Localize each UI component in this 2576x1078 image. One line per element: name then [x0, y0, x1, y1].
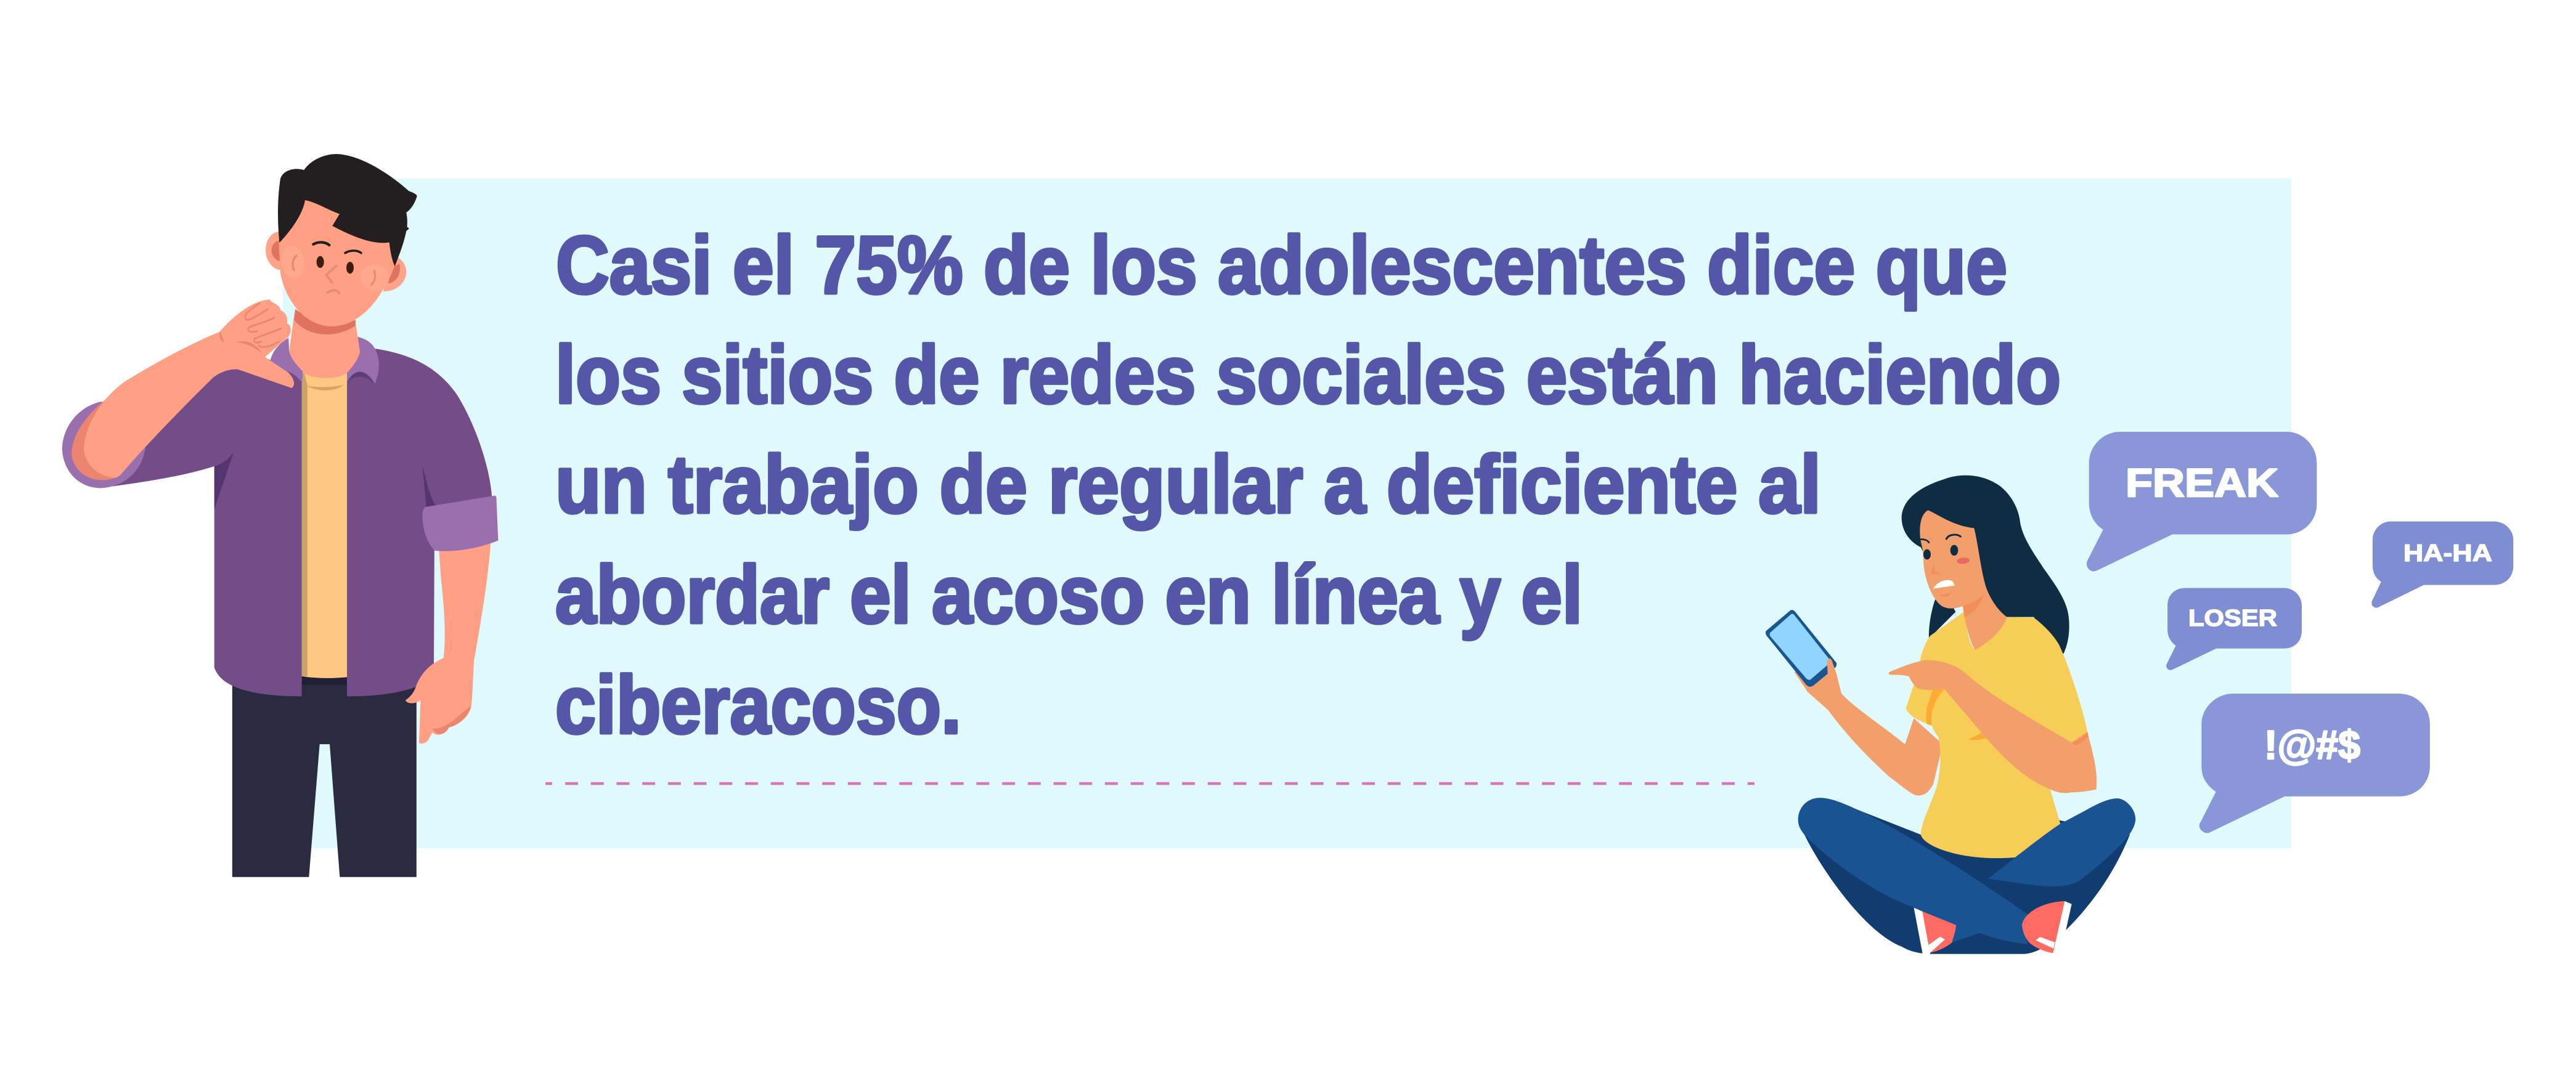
heading: main statement: [555, 220, 2061, 751]
speech bubble: LOSER: [2166, 588, 2302, 670]
speech bubble: FREAK: FREAK: [2126, 460, 2278, 505]
man body: [112, 309, 498, 877]
heading: main statement: abordar el acoso en línea y el: [555, 549, 1583, 641]
panel: light blue background: [283, 179, 2291, 848]
man arm with thumb down: [62, 299, 294, 488]
speech bubble: HA-HA: HA-HA: [2403, 540, 2492, 567]
woman legs: [1795, 611, 2135, 954]
woman phone and pointing arm: [1766, 610, 2097, 793]
woman face: [1920, 510, 2007, 650]
speech bubble: LOSER: LOSER: [2188, 606, 2277, 631]
heading: main statement: Casi el 75% de los adolescentes dice que: [556, 220, 2007, 311]
heading: main statement: un trabajo de regular a deficiente al: [555, 439, 1821, 530]
speech bubble: symbols: !@#$: [2264, 722, 2360, 768]
speech bubble: symbols: [2199, 694, 2430, 833]
illustration: man giving thumbs down: [62, 154, 498, 877]
speech bubble: HA-HA: [2371, 522, 2513, 608]
man head: [266, 154, 417, 326]
heading: main statement: los sitios de redes sociales están haciendo: [555, 330, 2061, 421]
speech bubble: FREAK: [2087, 432, 2317, 572]
woman hair: [1902, 476, 2069, 654]
heading: main statement: ciberacoso.: [555, 660, 961, 751]
illustration: woman looking at phone: [1766, 476, 2135, 954]
